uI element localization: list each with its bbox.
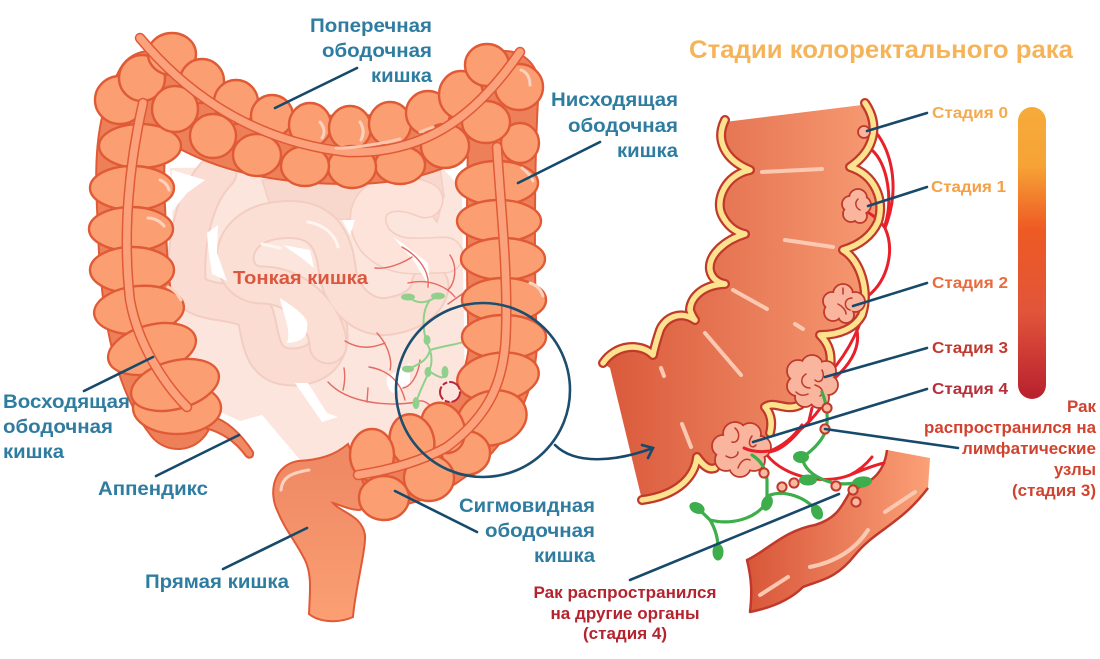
colon section highlights xyxy=(661,169,833,447)
labels left anatomy: ободочная xyxy=(322,41,432,62)
stage labels: Стадия 0 xyxy=(932,105,1008,122)
tumor stage 0 xyxy=(858,126,870,138)
labels left anatomy: кишка xyxy=(617,141,678,162)
labels left anatomy: Восходящая xyxy=(3,392,130,413)
red vessels into stage 4 tumor xyxy=(744,425,802,452)
other organs callout: на другие органы xyxy=(550,605,700,623)
tumor stage 4 xyxy=(712,422,771,477)
lymph node callout: Рак xyxy=(1067,398,1097,416)
labels left anatomy: Поперечная xyxy=(310,16,432,37)
stage labels: Стадия 2 xyxy=(932,275,1008,292)
colon muscle bands xyxy=(127,38,543,490)
stage labels: Стадия 3 xyxy=(932,340,1008,357)
labels left anatomy: кишка xyxy=(3,442,64,463)
haustra: descending and sigmoid colon xyxy=(350,123,546,520)
haustra: transverse colon xyxy=(119,33,543,188)
lymph node callout: (стадия 3) xyxy=(1012,482,1096,500)
colon section walls xyxy=(603,103,880,500)
tumor stage 1 xyxy=(842,189,871,223)
stage labels xyxy=(931,105,1008,398)
label lines xyxy=(84,68,600,569)
labels left anatomy: ободочная xyxy=(485,521,595,542)
other organs callout: Рак распространился xyxy=(534,584,716,602)
red vessels xyxy=(744,135,893,479)
blood vessels and lymph in small intestine xyxy=(328,247,465,409)
labels left anatomy: ободочная xyxy=(568,116,678,137)
other organs callout xyxy=(534,584,716,643)
labels left anatomy: Прямая кишка xyxy=(145,572,289,593)
stage labels: Стадия 1 xyxy=(931,179,1006,196)
haustra: ascending colon xyxy=(89,76,225,434)
small intestine xyxy=(170,165,465,462)
tumor stage 3 xyxy=(787,355,838,408)
arrow from magnifier xyxy=(555,445,653,459)
tumor stage 2 xyxy=(823,284,865,323)
labels left anatomy: ободочная xyxy=(3,417,113,438)
small tumor in colon xyxy=(440,382,460,402)
lymph node callout xyxy=(924,398,1097,500)
lymph node callout: лимфатические xyxy=(962,440,1096,458)
lymph node callout: узлы xyxy=(1054,461,1096,479)
labels left anatomy: Аппендикс xyxy=(98,479,208,500)
lymphatic vessels and nodes xyxy=(687,392,873,560)
colon backing xyxy=(130,85,505,478)
labels left anatomy: Нисходящая xyxy=(551,90,678,111)
rectum xyxy=(273,444,370,621)
colon section body xyxy=(603,105,880,500)
title: Стадии колоректального рака xyxy=(689,36,1074,64)
labels left anatomy xyxy=(3,16,678,593)
magnifier circle xyxy=(396,303,570,477)
stage gradient bar xyxy=(1018,107,1046,399)
lymph node callout: распространился на xyxy=(924,419,1097,437)
stage leader lines xyxy=(630,113,958,580)
labels left anatomy: Тонкая кишка xyxy=(233,267,369,288)
bottom organ xyxy=(747,450,930,612)
appendix xyxy=(205,417,253,458)
stage labels: Стадия 4 xyxy=(932,381,1008,398)
labels left anatomy: Сигмовидная xyxy=(459,496,595,517)
other organs callout: (стадия 4) xyxy=(583,625,667,643)
labels left anatomy: кишка xyxy=(534,546,595,567)
labels left anatomy: кишка xyxy=(371,66,432,87)
